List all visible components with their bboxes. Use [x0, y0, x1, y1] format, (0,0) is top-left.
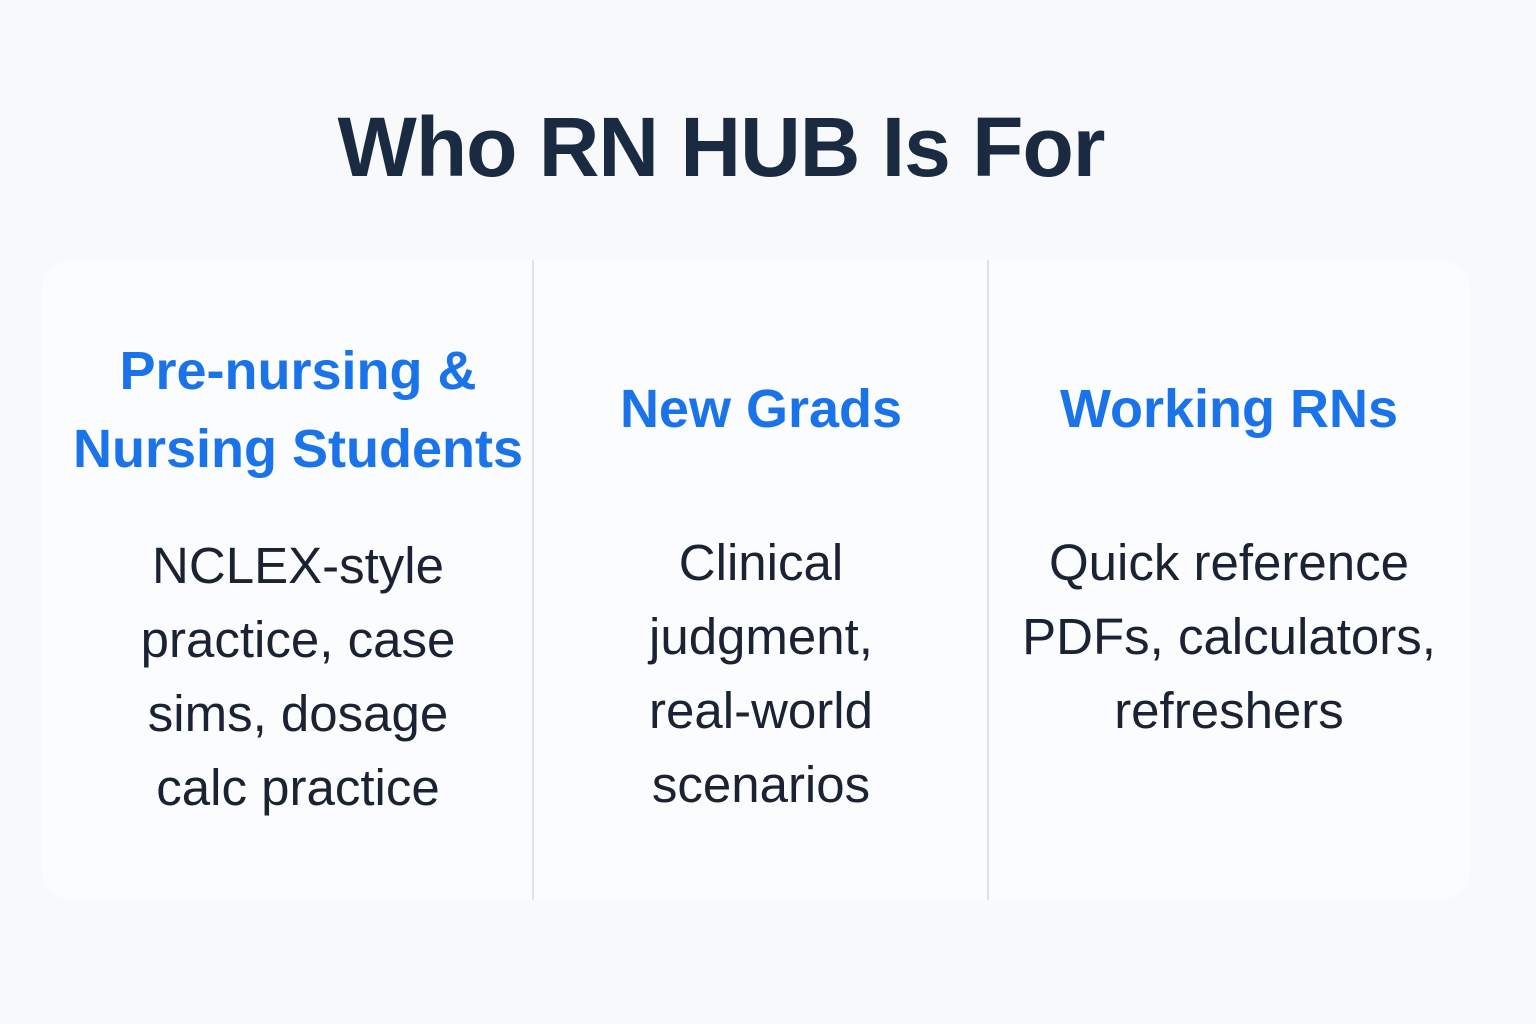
text: new grads: scenarios — [652, 756, 870, 813]
panel: working RNs — [1022, 379, 1436, 739]
panel: students — [73, 341, 523, 816]
title: Who RN HUB Is For — [338, 100, 1104, 194]
text: working RNs: Quick reference — [1049, 534, 1409, 591]
heading: students: Nursing Students — [73, 419, 523, 479]
text: new grads — [648, 534, 873, 813]
heading: students — [73, 341, 523, 479]
panel: new grads — [620, 379, 902, 813]
text: new grads: judgment, — [649, 608, 873, 665]
heading: working RNs: Working RNs — [1060, 379, 1398, 439]
text: new grads: real-world — [649, 682, 873, 739]
text: working RNs — [1022, 534, 1436, 739]
text: working RNs: refreshers — [1114, 682, 1344, 739]
heading: new grads: New Grads — [620, 379, 902, 439]
text: students — [141, 537, 455, 816]
text: students: practice, case — [141, 611, 455, 668]
panel: card background — [42, 260, 1470, 900]
text: working RNs: PDFs, calculators, — [1022, 608, 1436, 665]
text: students: sims, dosage — [148, 685, 448, 742]
heading: students: Pre-nursing & — [119, 341, 477, 401]
text: students: calc practice — [156, 759, 440, 816]
text: students: NCLEX-style — [152, 537, 444, 594]
text: new grads: Clinical — [679, 534, 843, 591]
